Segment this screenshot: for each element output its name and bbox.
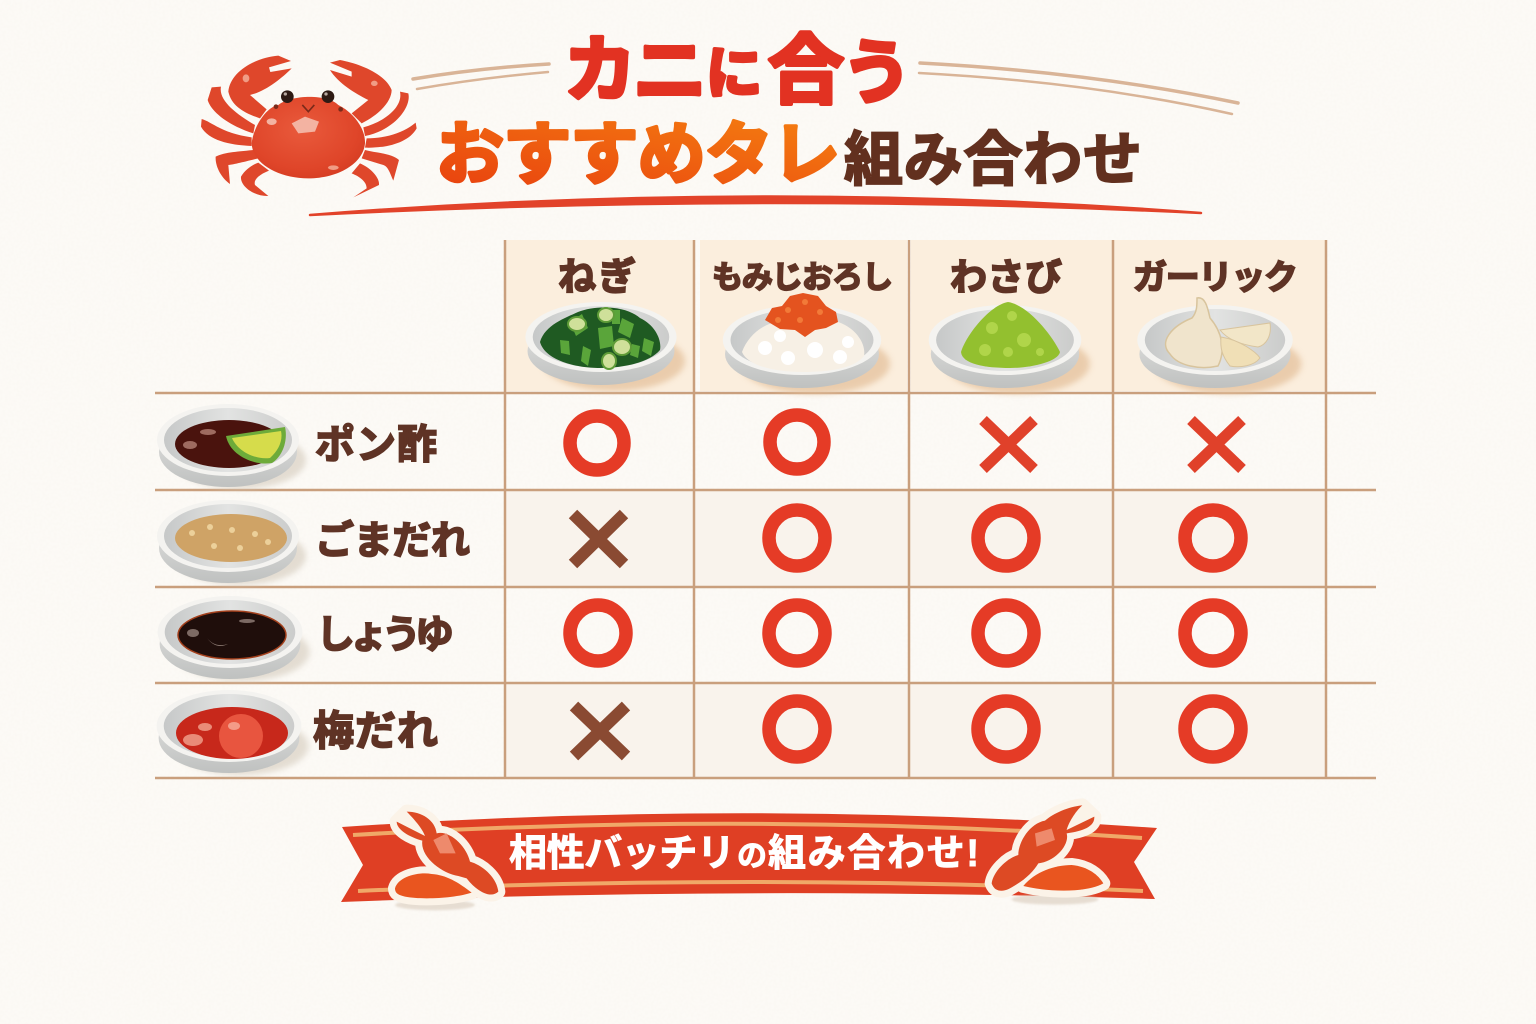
row: ポン酢: [157, 404, 437, 489]
icon: garlic bowl: [1137, 298, 1301, 394]
marks row 1: [570, 415, 1242, 470]
icon: grated radish bowl: [723, 293, 890, 394]
row: ポン酢: ポン酢: [315, 423, 437, 467]
title line 1: に: [706, 42, 762, 105]
banner text: 組み合わせ!: [768, 833, 979, 875]
column: ねぎ: [525, 257, 685, 391]
icon: left crab claw: [395, 812, 498, 910]
icon: crab: [201, 56, 417, 197]
column: もみじおろし: [712, 260, 893, 394]
title line 1: [564, 29, 912, 114]
title underline: [310, 196, 1201, 215]
marks row 4: [574, 701, 1241, 757]
row shading: [505, 491, 1326, 778]
marks row 2: [573, 510, 1241, 566]
column: ガーリック: ガーリック: [1133, 259, 1298, 297]
row: 梅だれ: 梅だれ: [313, 708, 438, 754]
row: しょうゆ: [158, 596, 454, 681]
title line 2 orange: おすすめタレ: [436, 117, 840, 193]
row: ごまだれ: [157, 500, 470, 585]
title line 1: う: [842, 34, 912, 112]
banner text: の: [737, 840, 767, 873]
icon: soy sauce bowl: [158, 596, 310, 681]
header backgrounds: [505, 240, 1326, 391]
banner text: 相性バッチリ: [509, 833, 735, 875]
marks row 3: [570, 605, 1241, 661]
comparison table: [155, 240, 1376, 778]
title line 1: 合: [768, 29, 844, 114]
column: もみじおろし: もみじおろし: [712, 260, 893, 295]
decorative title strokes: [413, 63, 1238, 114]
column: わさび: わさび: [950, 257, 1062, 298]
icon: plum sauce bowl: [157, 690, 309, 775]
title line 1: カ: [564, 31, 636, 111]
column: わさび: [929, 257, 1090, 394]
column: ねぎ: ねぎ: [558, 257, 636, 299]
title line 1: ニ: [633, 30, 707, 113]
row: ごまだれ: ごまだれ: [315, 520, 470, 563]
icon: ponzu bowl: [157, 404, 306, 489]
row: 梅だれ: [157, 690, 438, 775]
column: ガーリック: [1133, 259, 1301, 394]
row: しょうゆ: しょうゆ: [316, 614, 454, 657]
icon: sesame sauce bowl: [157, 500, 306, 585]
icon: green onion bowl: [525, 302, 685, 391]
title line 2 brown: 組み合わせ: [844, 127, 1142, 193]
title: [436, 29, 1142, 193]
banner text: [509, 833, 979, 875]
banner ribbon: [341, 805, 1157, 910]
icon: right crab claw: [992, 805, 1103, 905]
icon: wasabi bowl: [929, 302, 1090, 394]
